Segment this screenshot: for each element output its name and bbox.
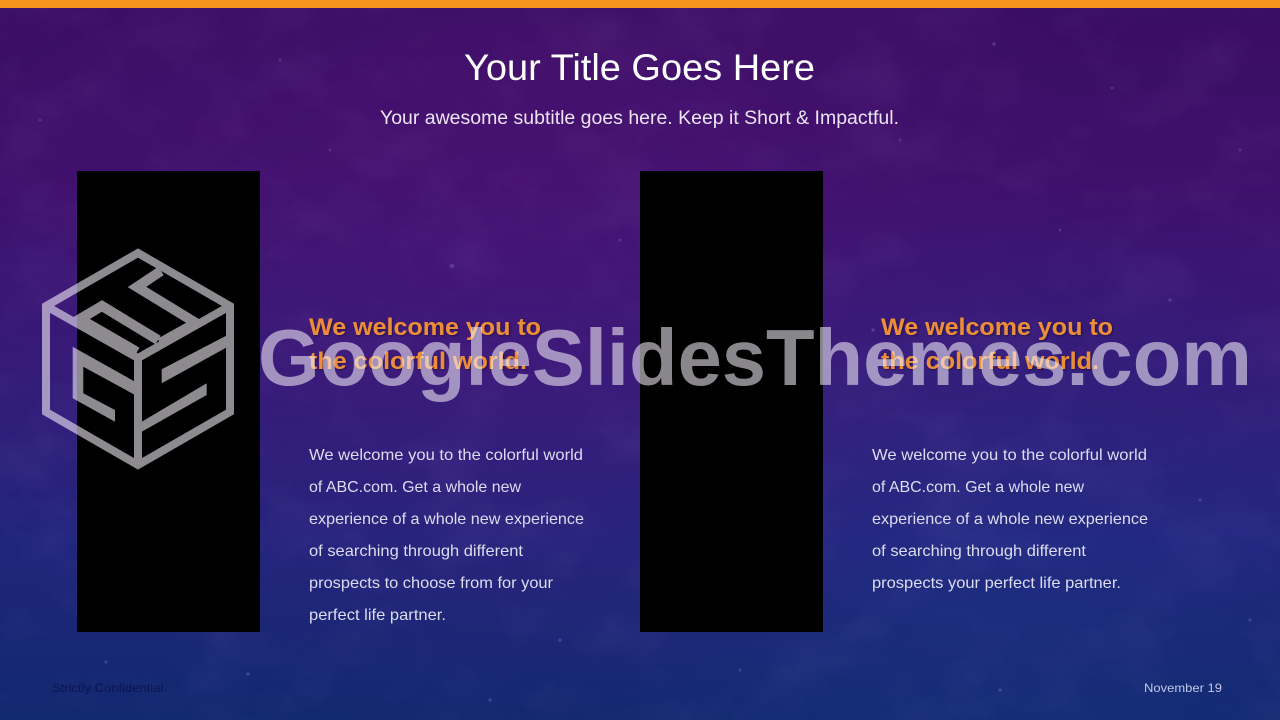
body text: left column: prospects to choose from for your [309,575,554,592]
body text: left column: of ABC.com. Get a whole new [309,479,521,496]
watermark text: GoogleSlidesThemes.com [258,313,1252,402]
body text: left column: of searching through different [309,543,524,560]
heading: left column: the colorful world. [309,348,527,375]
body text: right column: experience of a whole new experience [872,511,1148,528]
footer: confidentiality note: Strictly Confidential. [52,681,167,695]
heading: right column: We welcome you to [881,314,1113,341]
body text: left column: perfect life partner. [309,607,446,624]
image placeholder: right [640,171,823,632]
subtitle: Your awesome subtitle goes here. Keep it Short & Impactful. [380,108,899,129]
body text: left column: experience of a whole new experience [309,511,584,528]
heading: right column: the colorful world. [881,348,1099,375]
top accent bar [0,0,1280,8]
footer: date: November 19 [1144,681,1222,695]
body text: right column: prospects your perfect life partner. [872,575,1121,592]
heading: right column [881,314,1113,375]
body text: right column: We welcome you to the colorful world [872,447,1147,464]
body text: left column: We welcome you to the colorful world [309,447,583,464]
title: Your Title Goes Here [464,47,815,88]
image placeholder: left [77,171,260,632]
body text: left column [309,447,584,624]
body text: right column: of searching through different [872,543,1087,560]
body text: right column: of ABC.com. Get a whole new [872,479,1084,496]
watermark logo: cube [46,253,231,465]
heading: left column: We welcome you to [309,314,541,341]
heading: left column [309,314,541,375]
body text: right column [872,447,1148,592]
